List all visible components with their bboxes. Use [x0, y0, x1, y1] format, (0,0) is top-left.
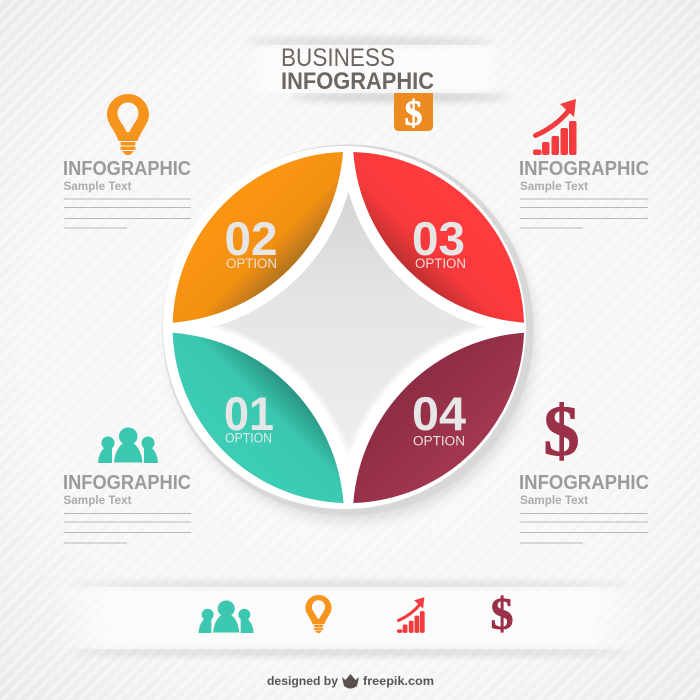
icon: people: [98, 427, 158, 463]
icon: light bulb: [107, 94, 149, 155]
title: infographic: INFOGRAPHIC: [281, 68, 434, 95]
main circle: [162, 144, 536, 522]
petal 02 orange: OPTION: [226, 256, 277, 271]
lower rim soft edge: [212, 328, 485, 463]
petal 01 teal: 01: [224, 387, 274, 440]
icon: people small: [198, 600, 254, 633]
petal 01 teal: [173, 333, 344, 503]
block: bottom right: INFOGRAPHIC: [519, 471, 649, 494]
title: business: BUSINESS: [281, 44, 395, 72]
icon: dollar tab: $: [404, 93, 422, 133]
icon: bulb small: [305, 595, 332, 633]
block: top right: Sample Text: [520, 179, 588, 193]
icon: growth chart: [533, 99, 576, 155]
petal 04 maroon: 04: [412, 387, 466, 440]
footer credit: freepik.com: [363, 676, 434, 688]
block: bottom left: [63, 427, 191, 543]
block: top right: INFOGRAPHIC: [519, 157, 649, 180]
icon: crown: [342, 674, 359, 688]
petal 03 red: OPTION: [415, 256, 466, 271]
block: top right: [519, 99, 649, 228]
block: bottom left: INFOGRAPHIC: [63, 471, 191, 494]
petal 01 teal: OPTION: [225, 430, 272, 446]
title banner: [245, 38, 510, 101]
block: top left: [63, 94, 191, 228]
footer credit: [267, 674, 434, 688]
petal 02 orange: 02: [224, 212, 278, 265]
icon: chart small: [397, 597, 425, 633]
block: top left: Sample Text: [64, 179, 132, 193]
block: top left: INFOGRAPHIC: [63, 157, 191, 180]
outer ring: [162, 144, 534, 516]
petal 03 red: [353, 152, 524, 323]
block: bottom right: Sample Text: [520, 493, 588, 507]
petal 02 orange: [173, 152, 343, 323]
icon: dollar: $: [544, 391, 580, 471]
icon: dollar small: $: [490, 588, 514, 639]
center star: [212, 192, 485, 463]
bottom icon band: [50, 582, 650, 655]
petal 04 maroon: OPTION: [413, 434, 465, 448]
block: bottom left: Sample Text: [64, 493, 132, 507]
petal 04 maroon: [353, 333, 524, 503]
block: bottom right: [519, 391, 649, 543]
circle shadow: [168, 154, 536, 522]
footer credit: designed by: [267, 676, 339, 688]
petal 03 red: 03: [412, 212, 465, 265]
icon: dollar tab: [394, 93, 433, 133]
